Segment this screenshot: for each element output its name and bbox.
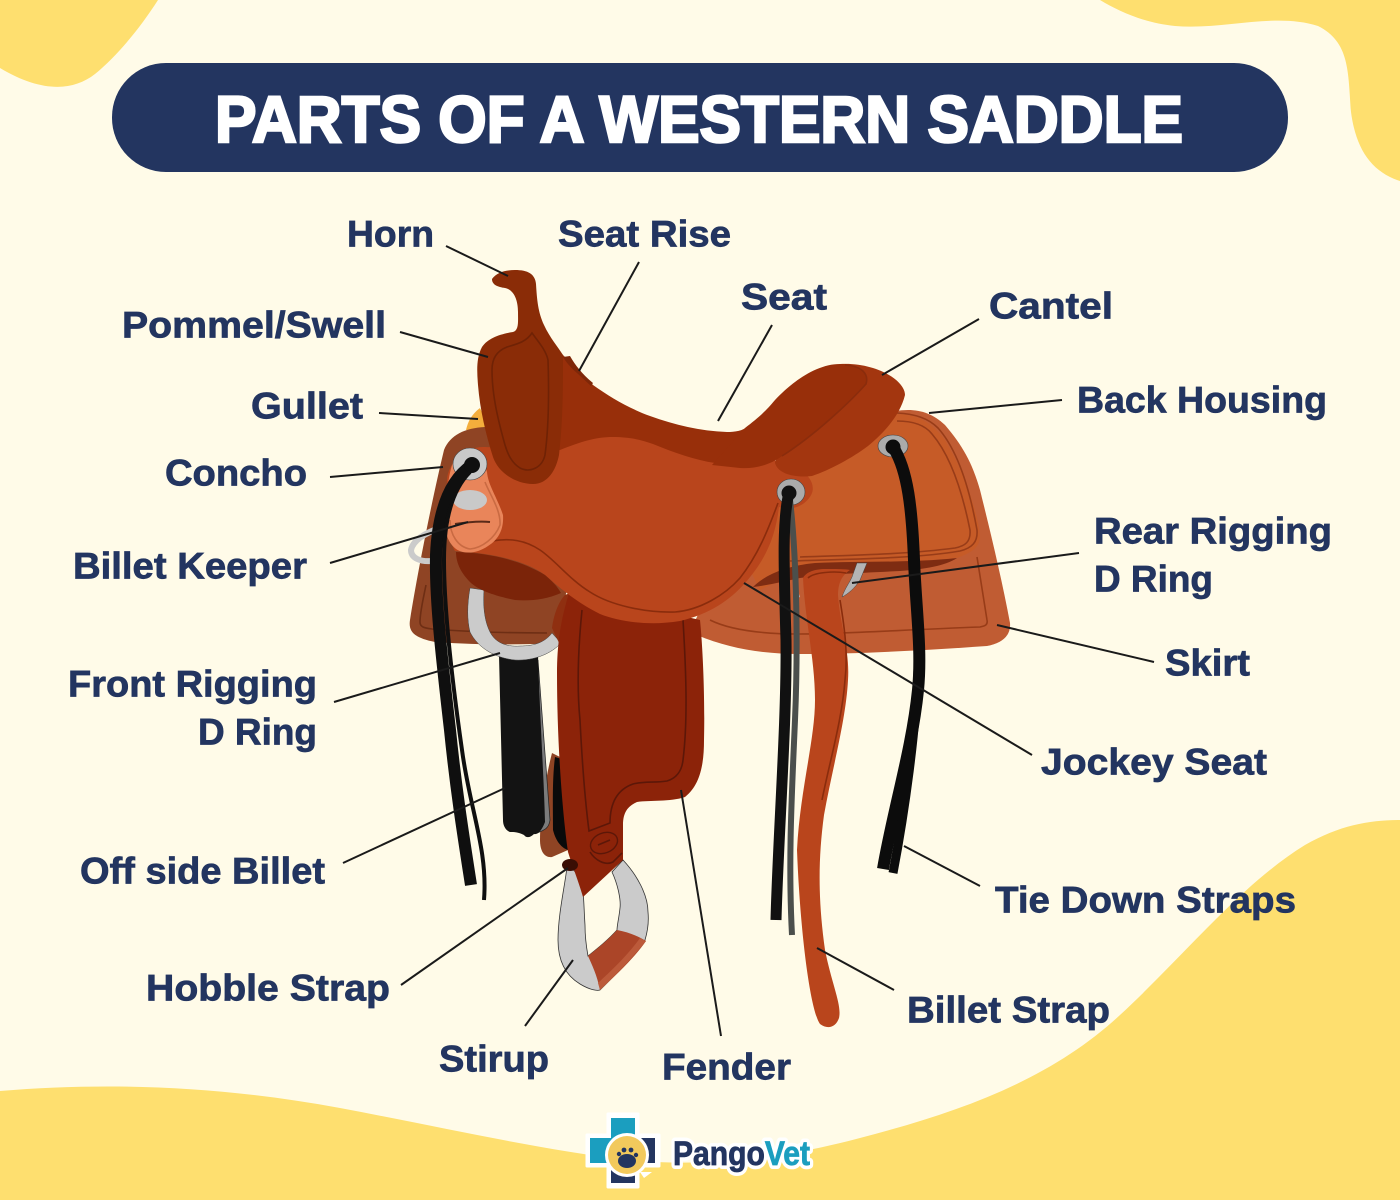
label: Seat Rise: Seat Rise bbox=[558, 214, 731, 254]
label: Front Rigging D Ring: D Ring bbox=[198, 712, 317, 752]
label: Billet Strap: Billet Strap bbox=[907, 990, 1110, 1030]
logo: PangoVet bbox=[587, 1114, 810, 1187]
hobble strap bbox=[562, 859, 578, 871]
label: Rear Rigging D Ring: D Ring bbox=[1094, 558, 1213, 600]
label: Tie Down Straps: Tie Down Straps bbox=[995, 880, 1296, 920]
cantel bbox=[712, 364, 905, 476]
front skirt bbox=[410, 427, 570, 644]
label: Jockey Seat: Jockey Seat bbox=[1041, 742, 1267, 782]
front rigging d ring bbox=[468, 588, 561, 660]
leader lines bbox=[330, 246, 1154, 1036]
gullet bbox=[466, 408, 490, 430]
icon: veterinary cross with paw bbox=[587, 1114, 659, 1187]
label: Stirup: Stirup bbox=[439, 1038, 549, 1080]
label: Hobble Strap: Hobble Strap bbox=[146, 968, 390, 1008]
billet strap bbox=[797, 569, 850, 1027]
rear concho rings bbox=[777, 435, 908, 505]
off side billet bbox=[499, 655, 568, 857]
label: Off side Billet: Off side Billet bbox=[80, 850, 325, 892]
tie down straps bbox=[436, 440, 919, 935]
label: Billet Keeper: Billet Keeper bbox=[73, 546, 307, 586]
stirrup bbox=[558, 860, 648, 990]
skirt bbox=[690, 410, 1010, 654]
label: Cantel: Cantel bbox=[989, 286, 1113, 326]
title banner: PARTS OF A WESTERN SADDLE bbox=[215, 82, 1183, 156]
rear rigging d ring bbox=[797, 563, 867, 598]
label: Pommel/Swell: Pommel/Swell bbox=[122, 304, 386, 346]
concho bbox=[453, 448, 490, 524]
text: PangoVet wordmark: PangoVet bbox=[673, 1135, 810, 1173]
fender bbox=[552, 590, 704, 897]
label: Back Housing: Back Housing bbox=[1077, 380, 1327, 420]
pommel swell and horn bbox=[477, 270, 563, 484]
title banner bbox=[112, 63, 1288, 172]
label: Skirt: Skirt bbox=[1165, 642, 1250, 684]
label: Rear Rigging D Ring: Rear Rigging bbox=[1094, 510, 1332, 552]
seat rise bbox=[540, 340, 760, 470]
label: Horn: Horn bbox=[347, 214, 434, 254]
label: Concho: Concho bbox=[165, 452, 307, 494]
label: Seat: Seat bbox=[741, 276, 827, 318]
label: Front Rigging D Ring bbox=[68, 664, 317, 752]
illustration: western saddle bbox=[410, 270, 1010, 1027]
text: PangoVet wordmark: PangoVet bbox=[673, 1135, 810, 1173]
jockey seat bbox=[446, 437, 813, 623]
label: Gullet: Gullet bbox=[251, 386, 363, 426]
billet keeper ring bbox=[411, 527, 442, 561]
label: Rear Rigging D Ring bbox=[1094, 510, 1332, 600]
label: Fender: Fender bbox=[662, 1046, 791, 1088]
label: Front Rigging D Ring: Front Rigging bbox=[68, 664, 317, 704]
